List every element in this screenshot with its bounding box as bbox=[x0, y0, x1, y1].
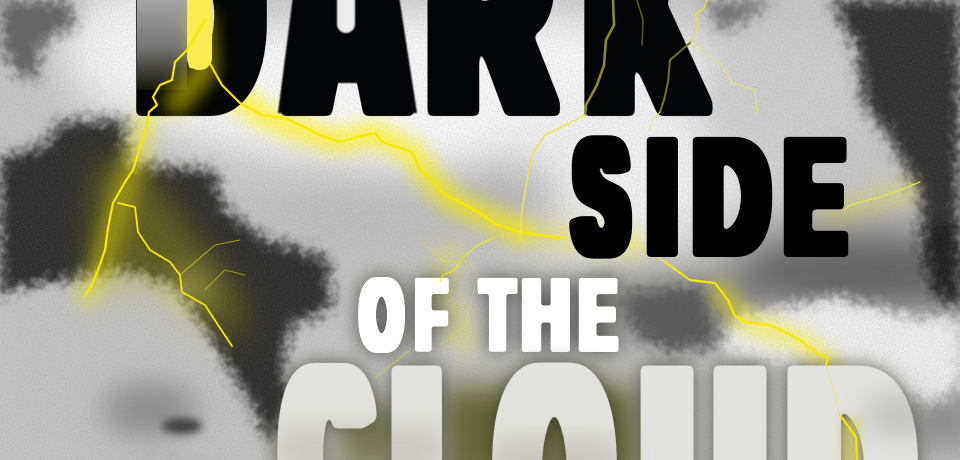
heading words: OF THE: O bbox=[361, 260, 402, 371]
letter A weight touch-ups bbox=[278, 0, 417, 113]
heading words: OF THE: H bbox=[522, 259, 569, 371]
heading word: SIDE: S bbox=[575, 106, 627, 289]
lightning: main bolt bbox=[85, 20, 857, 460]
heading word: SIDE: I bbox=[648, 107, 677, 289]
olive wash over dark storm mass bbox=[90, 150, 245, 345]
heading word: CLOUD bbox=[288, 307, 910, 460]
heading words: OF THE: F bbox=[417, 259, 445, 371]
cloud and yellow glow over letter D bbox=[137, 0, 212, 110]
lightning glow behind title bbox=[88, 85, 910, 365]
heading words: OF THE bbox=[361, 259, 616, 371]
lightning: mid branch bbox=[440, 237, 495, 282]
heading words: OF THE: E bbox=[580, 260, 616, 371]
shading across CLOUD letters bbox=[275, 400, 930, 460]
heading word: SIDE: E bbox=[786, 106, 844, 288]
haze and dark blot in lower cloud bbox=[102, 384, 202, 436]
lightning: upper right bolts over K bbox=[520, 0, 920, 240]
heading word: SIDE: D bbox=[694, 105, 769, 288]
heading word: DARK bbox=[139, 0, 700, 167]
lightning: left bolt bbox=[85, 20, 205, 296]
heading word: SIDE bbox=[575, 105, 844, 289]
olive shadow between lower title letters bbox=[340, 385, 640, 460]
bright cloud tops bbox=[0, 276, 960, 460]
yellow tint in letter D counter bbox=[842, 418, 860, 460]
heading words: OF THE: T bbox=[482, 259, 513, 371]
